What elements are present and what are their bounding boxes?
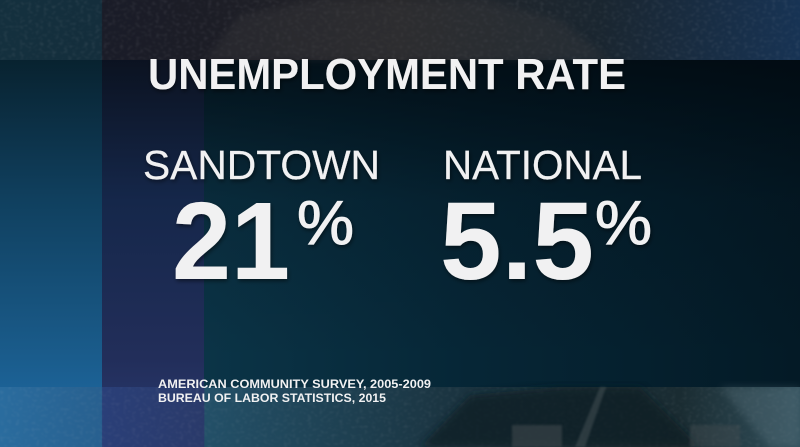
stat: National bbox=[440, 142, 652, 303]
value: 21%: 21 bbox=[172, 180, 290, 303]
stat: Sandtown bbox=[143, 142, 380, 303]
title: UNEMPLOYMENT RATE bbox=[148, 50, 626, 99]
label: Sandtown: SANDTOWN bbox=[143, 142, 380, 188]
top city photo band bbox=[0, 0, 800, 60]
bottom city photo band bbox=[0, 387, 800, 447]
value: 21% bbox=[172, 180, 354, 303]
value: 5.5%: % bbox=[595, 189, 652, 258]
value: 21%: % bbox=[297, 189, 354, 258]
source note bbox=[158, 377, 431, 405]
source note: BUREAU OF LABOR STATISTICS, 2015 bbox=[158, 391, 386, 405]
source note: AMERICAN COMMUNITY SURVEY, 2005-2009 bbox=[158, 377, 431, 391]
value: 5.5%: 5.5 bbox=[440, 180, 594, 303]
label: National: NATIONAL bbox=[443, 142, 642, 188]
